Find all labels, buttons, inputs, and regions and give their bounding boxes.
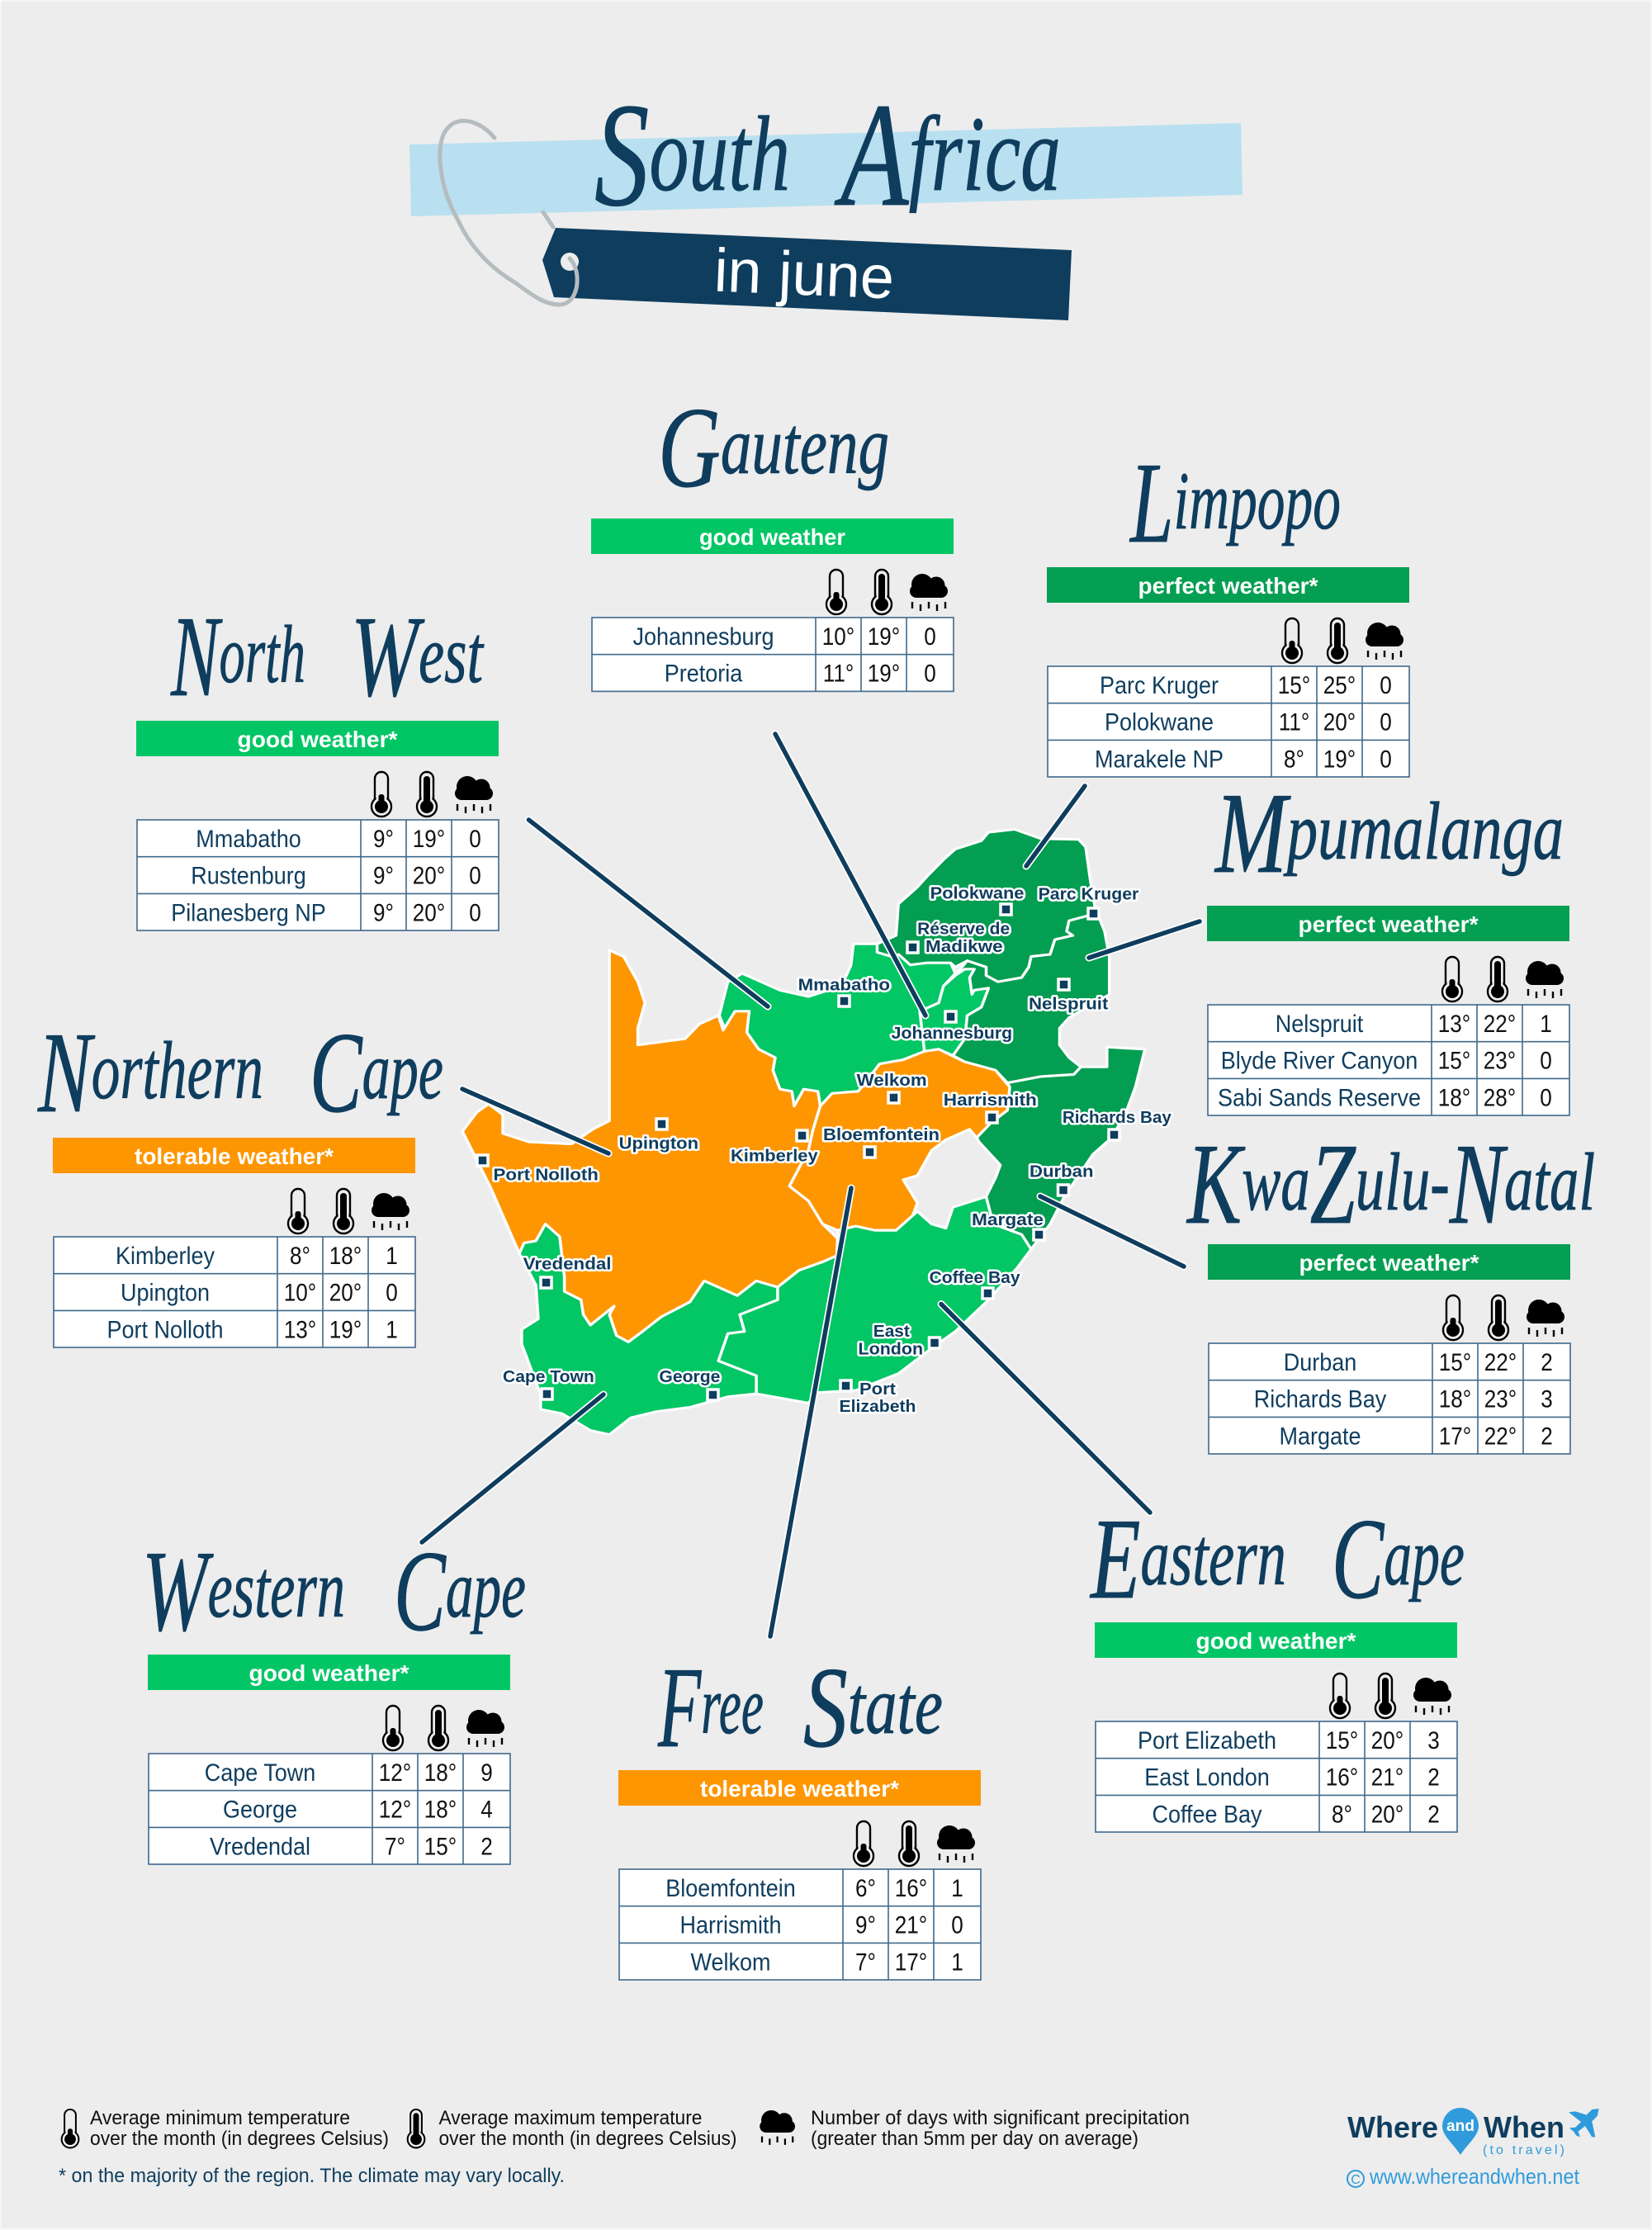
weather badge [618, 1770, 981, 1806]
climate table: 2 [1427, 1801, 1440, 1828]
weather badge: good weather* [1195, 1628, 1356, 1654]
climate table: 20° [413, 862, 445, 889]
climate table: 18° [1439, 1385, 1471, 1413]
title ribbon [409, 123, 1243, 216]
climate table: Polokwane [1105, 708, 1214, 736]
climate table: 9 [480, 1759, 493, 1786]
climate table: Pretoria [665, 660, 742, 688]
climate table: 22° [1484, 1348, 1517, 1375]
climate table: 0 [386, 1279, 398, 1306]
climate table [1048, 666, 1409, 777]
leader lines [422, 734, 1200, 1636]
heading: KwaZulu-Natal: N [1448, 1120, 1508, 1248]
heading: North West: W [351, 593, 425, 721]
climate table [1208, 1005, 1569, 1115]
climate table: 16° [895, 1874, 927, 1901]
climate table: Parc Kruger [1100, 672, 1219, 699]
climate table: 18° [1438, 1084, 1470, 1111]
climate table: 17° [895, 1948, 927, 1976]
main title: frica [909, 95, 1061, 214]
heading: Eastern Cape: astern [1140, 1511, 1286, 1603]
climate table: 8° [1332, 1801, 1352, 1828]
climate table: 2 [1541, 1348, 1553, 1375]
panel: Eastern Cape [1090, 1495, 1465, 1832]
weather badge: tolerable weather* [700, 1776, 899, 1802]
city labels: Réserve de [917, 920, 1010, 938]
icon: maximum temperature [408, 2109, 424, 2147]
climate table: 16° [1326, 1764, 1358, 1791]
climate table: 3 [1427, 1726, 1440, 1754]
heading: Northern Cape: N [37, 1009, 95, 1137]
climate table: 10° [284, 1279, 316, 1306]
climate table: 0 [469, 825, 481, 852]
climate table: 1 [1540, 1010, 1552, 1037]
icon: map pin [1442, 2108, 1479, 2155]
region: KwaZulu-Natal [977, 1047, 1145, 1249]
climate table: 1 [951, 1874, 963, 1901]
heading: Gauteng: auteng [721, 400, 889, 491]
heading: Mpumalanga: M [1214, 769, 1291, 897]
region: Eastern Cape [718, 1196, 1031, 1403]
climate table: 1 [386, 1242, 398, 1269]
climate table: Johannesburg [632, 623, 774, 651]
climate table: Blyde River Canyon [1221, 1047, 1418, 1075]
heading: Free State: F [657, 1644, 702, 1772]
climate table: 0 [1380, 708, 1392, 736]
legend [62, 2107, 1190, 2150]
panel: Northern Cape [37, 1009, 443, 1347]
city labels: Nelspruit [1029, 995, 1109, 1013]
column icons [854, 1821, 975, 1866]
region: North West [719, 944, 955, 1106]
weather badge: perfect weather* [1298, 911, 1479, 937]
climate table: 0 [924, 623, 936, 650]
climate table: Mmabatho [196, 826, 301, 853]
city labels: Elizabeth [839, 1398, 916, 1416]
climate table: 19° [329, 1316, 362, 1343]
heading: Limpopo: impopo [1174, 455, 1341, 547]
city labels [494, 885, 1172, 1416]
climate table: 18° [424, 1759, 457, 1786]
climate table: Welkom [691, 1948, 770, 1977]
weather badge [1047, 567, 1409, 603]
climate table: 13° [284, 1316, 316, 1343]
climate table: Kimberley [116, 1243, 215, 1270]
region: Mpumalanga [953, 908, 1110, 1083]
climate table: 3 [1541, 1385, 1553, 1413]
heading: Northern Cape: C [310, 1009, 363, 1137]
climate table: 9° [373, 899, 394, 926]
climate table: 19° [868, 623, 900, 650]
climate table: 8° [290, 1242, 310, 1269]
panel: Limpopo [1047, 439, 1409, 777]
copyright: C [1351, 2173, 1361, 2187]
climate table [1209, 1343, 1570, 1454]
climate table: Rustenburg [191, 862, 306, 890]
weather badge: tolerable weather* [135, 1143, 334, 1169]
heading: Western Cape: estern [207, 1543, 345, 1635]
climate table: 0 [924, 660, 936, 687]
city labels: Coffee Bay [930, 1269, 1021, 1287]
city labels: Polokwane [930, 885, 1024, 903]
weather badge [1208, 1244, 1570, 1280]
climate table: 19° [413, 825, 445, 852]
climate table: 1 [951, 1948, 963, 1976]
climate table: 4 [480, 1796, 493, 1823]
logo: Where and When: When [1484, 2110, 1564, 2144]
region: Northern Cape [462, 950, 838, 1342]
climate table: Marakele NP [1095, 746, 1224, 774]
climate table: East London [1144, 1764, 1270, 1792]
legend text: precipitation: Number of days with significant precipitation [811, 2107, 1190, 2129]
climate table: 22° [1484, 1010, 1516, 1037]
climate table: 0 [1540, 1084, 1552, 1111]
heading: North West: est [419, 608, 485, 700]
climate table: Port Elizabeth [1138, 1727, 1276, 1754]
column icons [1443, 1295, 1564, 1340]
panel: Western Cape [142, 1527, 526, 1864]
panel: Gauteng [591, 384, 954, 691]
main title: S [594, 73, 649, 237]
climate table: Upington [121, 1279, 210, 1307]
climate table: 18° [424, 1796, 457, 1823]
heading: Free State: S [803, 1644, 848, 1772]
climate table: 11° [1279, 708, 1309, 736]
heading: Free State: ree [701, 1659, 764, 1751]
city labels: Durban [1030, 1162, 1093, 1181]
climate table: Nelspruit [1276, 1011, 1363, 1038]
heading: Mpumalanga: pumalanga [1283, 785, 1564, 877]
climate table: Harrismith [680, 1911, 781, 1939]
climate table: 12° [379, 1796, 411, 1823]
climate table: 23° [1484, 1047, 1516, 1074]
weather badge: good weather* [238, 727, 398, 752]
luggage tag [542, 228, 1072, 320]
weather badge [53, 1138, 415, 1173]
main title: A [834, 73, 909, 237]
climate table [54, 1237, 415, 1347]
climate table: Pilanesberg NP [171, 899, 326, 927]
climate table: 7° [855, 1948, 876, 1976]
climate table: Richards Bay [1254, 1385, 1387, 1413]
climate table: 10° [822, 623, 854, 650]
main title: outh [649, 95, 790, 214]
climate table: 0 [1380, 746, 1392, 773]
region: Free State [789, 1049, 1010, 1230]
climate table: George [223, 1796, 297, 1824]
column icons [1442, 957, 1564, 1001]
weather badge [1095, 1622, 1457, 1658]
weather badge: perfect weather* [1138, 573, 1318, 599]
climate table: 0 [1380, 671, 1392, 698]
climate table: Port Nolloth [107, 1316, 223, 1344]
climate table: 19° [1323, 746, 1356, 773]
heading: Limpopo: L [1129, 439, 1174, 567]
climate table: 11° [823, 660, 854, 687]
city labels: Parc Kruger [1039, 886, 1139, 904]
tag hole [561, 253, 579, 271]
climate table: 2 [1541, 1423, 1553, 1450]
climate table [149, 1754, 510, 1864]
legend text: minimum temperature: over the month (in degrees Celsius) [90, 2128, 389, 2150]
climate table [592, 618, 954, 691]
region: Western Cape [519, 1224, 778, 1435]
city labels: Port [859, 1380, 896, 1399]
climate table: Sabi Sands Reserve [1218, 1084, 1421, 1112]
legend text: maximum temperature: over the month (in degrees Celsius) [439, 2128, 736, 2150]
column icons [372, 772, 493, 817]
city labels: Cape Town [503, 1368, 594, 1386]
icon: precipitation [760, 2110, 795, 2145]
city labels: George [659, 1368, 720, 1386]
climate table: 2 [480, 1833, 493, 1860]
heading: Northern Cape [37, 1009, 443, 1137]
heading: Northern Cape: ape [362, 1025, 443, 1116]
climate table: 20° [329, 1279, 362, 1306]
climate table: 15° [424, 1833, 457, 1860]
heading: KwaZulu-Natal: Z [1310, 1120, 1356, 1248]
climate table: 20° [1323, 708, 1356, 736]
weather badge [148, 1655, 510, 1690]
city markers [477, 904, 1119, 1400]
climate table: 25° [1323, 671, 1356, 698]
climate table: 15° [1438, 1047, 1470, 1074]
climate table: 17° [1439, 1423, 1471, 1450]
logo: Where and When [1347, 2108, 1599, 2189]
copyright: www.whereandwhen.net [1369, 2164, 1580, 2189]
weather badge [136, 721, 499, 756]
panel: North West [136, 593, 499, 930]
heading: Gauteng: G [658, 384, 721, 512]
panel: Free State [618, 1644, 981, 1980]
weather badge: good weather* [249, 1660, 409, 1686]
legend text: minimum temperature [90, 2107, 389, 2150]
subtitle: in june [712, 235, 896, 312]
climate table: 0 [469, 899, 481, 926]
climate table: 8° [1284, 746, 1304, 773]
climate table: Cape Town [205, 1759, 315, 1787]
logo: Where and When: and [1446, 2118, 1474, 2135]
tag string [440, 121, 577, 305]
climate table: 9° [373, 825, 394, 852]
city labels: Madikwe [925, 938, 1003, 956]
climate table: 7° [385, 1833, 405, 1860]
heading: North West: N [170, 593, 223, 721]
icon: minimum temperature [62, 2109, 78, 2147]
region: Gauteng [920, 969, 988, 1055]
city labels: Margate [972, 1211, 1044, 1229]
city labels: Upington [619, 1135, 698, 1153]
heading: Western Cape: C [394, 1527, 447, 1655]
heading: Free State [657, 1644, 943, 1772]
column icons [826, 570, 948, 614]
panel: KwaZulu-Natal [1186, 1120, 1595, 1454]
climate table: 15° [1439, 1348, 1471, 1375]
climate table: 9° [855, 1911, 876, 1939]
climate table: Bloemfontein [665, 1875, 796, 1902]
climate table: 20° [1371, 1801, 1403, 1828]
legend text: maximum temperature [439, 2107, 736, 2150]
climate table: 23° [1484, 1385, 1517, 1413]
climate table: 2 [1427, 1764, 1440, 1791]
heading: Eastern Cape: ape [1384, 1511, 1465, 1603]
heading: Eastern Cape: C [1332, 1495, 1385, 1623]
climate table: 28° [1484, 1084, 1516, 1111]
climate table: 20° [1371, 1726, 1403, 1754]
city labels: Richards Bay [1063, 1109, 1172, 1127]
climate table: 6° [855, 1874, 876, 1901]
city labels: Johannesburg [892, 1025, 1012, 1043]
legend text: minimum temperature: Average minimum temperature [90, 2107, 350, 2129]
weather badge [1207, 906, 1569, 941]
climate table: 0 [469, 862, 481, 889]
climate table: Durban [1284, 1349, 1356, 1376]
region: Limpopo [877, 829, 1095, 982]
city labels: Kimberley [731, 1148, 819, 1166]
climate table: 22° [1484, 1423, 1517, 1450]
climate table: 21° [895, 1911, 927, 1939]
climate table [619, 1869, 981, 1980]
logo: Where and When: (to travel) [1483, 2143, 1564, 2157]
climate table: 20° [413, 899, 445, 926]
heading: North West [170, 593, 485, 721]
legend text: precipitation [811, 2107, 1190, 2150]
icon: plane [1569, 2109, 1599, 2137]
climate table: 1 [386, 1316, 398, 1343]
heading: Eastern Cape: E [1090, 1495, 1140, 1623]
climate table: Coffee Bay [1153, 1801, 1262, 1829]
weather badge: perfect weather* [1299, 1250, 1479, 1276]
heading: KwaZulu-Natal: ulu- [1356, 1136, 1450, 1228]
climate table: 9° [373, 862, 394, 889]
climate table [1096, 1721, 1457, 1832]
main title [594, 73, 1061, 237]
climate table: 12° [379, 1759, 411, 1786]
map of South Africa [462, 829, 1145, 1435]
climate table: 15° [1278, 671, 1310, 698]
heading: KwaZulu-Natal: wa [1242, 1136, 1310, 1228]
heading: Eastern Cape [1090, 1495, 1465, 1623]
city labels: Mmabatho [798, 976, 890, 994]
city labels: Bloemfontein [823, 1126, 940, 1144]
heading: Western Cape: W [142, 1527, 214, 1655]
legend text: maximum temperature: Average maximum temperature [439, 2107, 702, 2129]
weather badge: good weather [699, 524, 845, 550]
column icons [288, 1189, 409, 1233]
climate table [137, 820, 499, 930]
city labels: Vredendal [523, 1256, 611, 1274]
footnote: * on the majority of the region. The climate may vary locally. [59, 2165, 565, 2187]
legend text: precipitation: (greater than 5mm per day on average) [811, 2128, 1138, 2150]
weather badge [591, 518, 954, 554]
column icons [383, 1706, 504, 1750]
climate table: 13° [1438, 1010, 1470, 1037]
city labels: Port Nolloth [494, 1166, 599, 1184]
climate table: 15° [1326, 1726, 1358, 1754]
climate table: 21° [1371, 1764, 1403, 1791]
city labels: East [873, 1323, 910, 1341]
heading: KwaZulu-Natal: atal [1504, 1136, 1595, 1228]
logo: Where and When: Where [1347, 2110, 1438, 2144]
climate table: 0 [951, 1911, 963, 1939]
heading: North West: orth [220, 608, 305, 700]
climate table: Margate [1280, 1423, 1361, 1451]
column icons [1330, 1674, 1451, 1718]
heading: Free State: tate [848, 1659, 943, 1751]
panel: Mpumalanga [1207, 769, 1569, 1115]
climate table: 18° [329, 1242, 362, 1269]
title tag [409, 73, 1243, 320]
heading: Northern Cape: orthern [92, 1025, 263, 1116]
column icons [1282, 618, 1403, 663]
city labels: London [859, 1341, 923, 1359]
heading: Western Cape: ape [446, 1543, 526, 1635]
heading: KwaZulu-Natal: K [1186, 1120, 1246, 1248]
city labels: Welkom [857, 1072, 927, 1090]
climate table: Vredendal [210, 1833, 310, 1861]
climate table: 19° [868, 660, 900, 687]
heading: Western Cape [142, 1527, 526, 1655]
city labels: Harrismith [944, 1091, 1037, 1110]
climate table: 0 [1540, 1047, 1552, 1074]
